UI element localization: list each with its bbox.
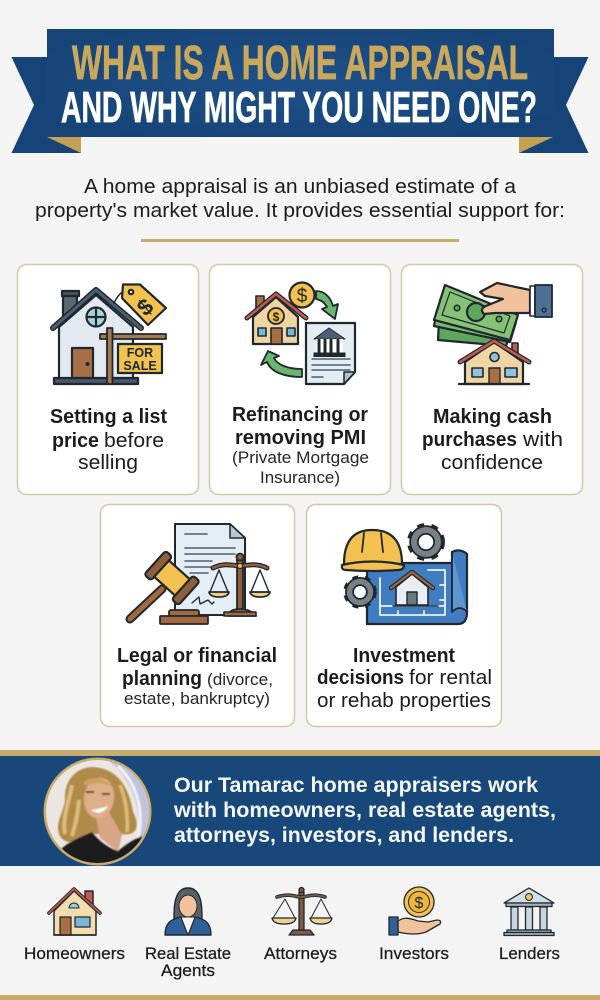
portrait (44, 758, 152, 866)
audience: investors: Investors (379, 945, 449, 963)
card text (117, 645, 277, 708)
card text: Legal or financial (117, 645, 277, 667)
card text: price (52, 430, 99, 452)
panel: investment decisions (306, 504, 502, 726)
card text: decisions (317, 667, 404, 689)
card text: Setting a list (50, 406, 167, 428)
card text: Insurance) (260, 469, 340, 487)
card text: confidence (441, 452, 543, 474)
icon: house for sale: $ (132, 293, 158, 321)
card text: or rehab properties (317, 690, 491, 712)
icon: house for sale: FOR (127, 346, 153, 360)
icon: refinance house and document: $ (297, 286, 308, 307)
intro text: property's market value. It provides essential support for: (35, 200, 565, 222)
banner text: with homeowners, real estate agents, (173, 799, 556, 822)
panel: appraisers banner (0, 750, 600, 870)
panel: cash purchases (402, 264, 582, 494)
card text: selling (78, 452, 138, 474)
icon: refinance house and document (247, 282, 355, 384)
card text: Making cash (433, 406, 552, 428)
card text (422, 406, 563, 474)
intro text (35, 176, 565, 222)
icon: gavel, scales, document (130, 524, 270, 624)
card text: (Private Mortgage (232, 449, 369, 467)
icon: refinance house and document: $ (273, 310, 280, 324)
audience: homeowners: Homeowners (24, 945, 125, 963)
panel: legal or financial planning (100, 504, 294, 726)
panel: setting a list price (18, 264, 198, 494)
icon: blueprint with helmet and gears (342, 525, 467, 624)
card text: for rental (409, 667, 492, 689)
audience: real estate agents: Real Estate (145, 945, 231, 963)
audience: investors (379, 887, 449, 963)
card text (317, 645, 492, 712)
card text: before (104, 430, 164, 452)
banner text (173, 774, 556, 847)
card text: removing PMI (235, 427, 366, 449)
card text: planning (122, 668, 202, 690)
audience: real estate agents: Agents (161, 962, 215, 980)
card text (50, 406, 167, 474)
audience: lenders (499, 888, 560, 963)
card text: estate, bankruptcy) (124, 690, 270, 708)
ribbon left fold (47, 137, 81, 153)
card text: with (522, 429, 563, 451)
card text: purchases (422, 429, 517, 451)
audience: lenders: Lenders (499, 945, 560, 963)
title ribbon (12, 29, 588, 153)
audience: attorneys (264, 888, 337, 963)
banner text: Our Tamarac home appraisers work (174, 774, 538, 797)
panel: refinancing (210, 264, 390, 494)
audience: real estate agents (145, 888, 231, 980)
audience: investors: $ (415, 895, 424, 912)
audience: attorneys: Attorneys (264, 945, 337, 963)
ribbon left tail (12, 57, 81, 153)
icon: house for sale (53, 284, 166, 384)
banner text: attorneys, investors, and lenders. (174, 824, 514, 847)
icon: cash and house (434, 283, 552, 384)
card text: Investment (353, 645, 455, 667)
ribbon right fold (519, 137, 553, 153)
intro text: A home appraisal is an unbiased estimate of a (84, 176, 517, 198)
audience: homeowners (24, 889, 125, 963)
icon: house for sale: SALE (123, 359, 157, 373)
card text: (divorce, (207, 671, 273, 689)
ribbon right tail (519, 57, 588, 153)
card text (232, 404, 369, 487)
ribbon main band (47, 29, 554, 137)
card text: Refinancing or (232, 404, 368, 426)
